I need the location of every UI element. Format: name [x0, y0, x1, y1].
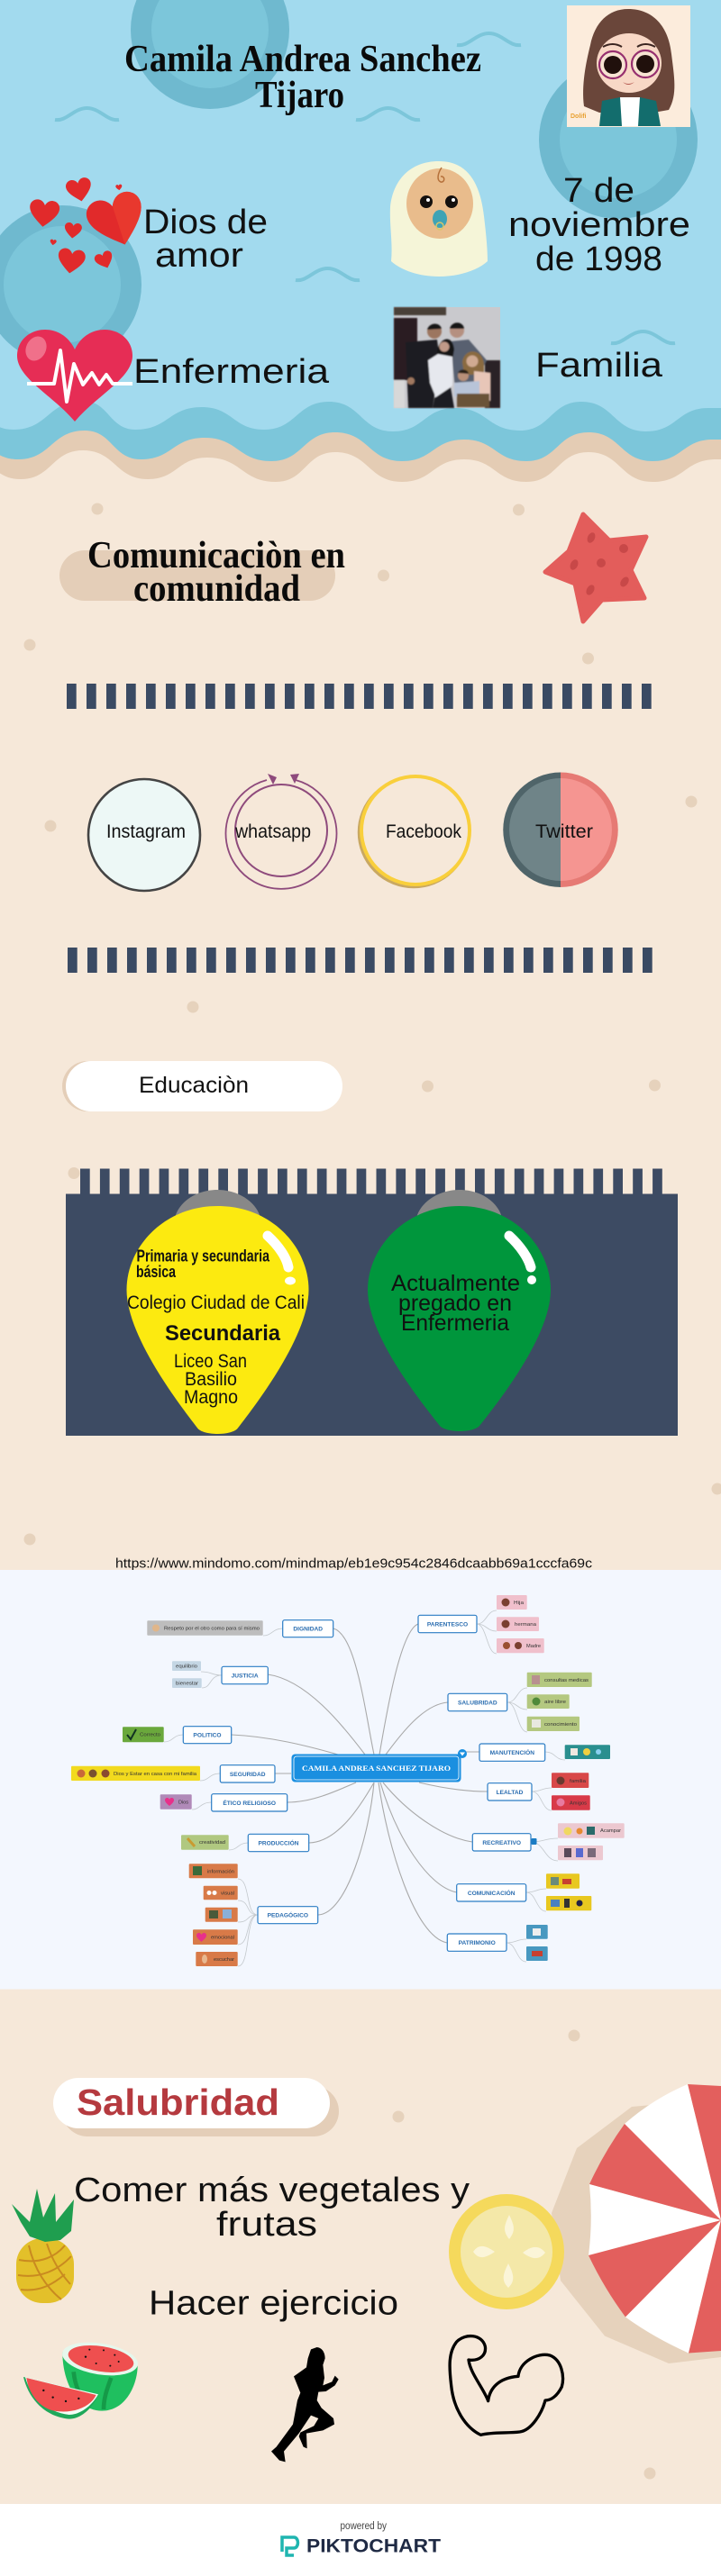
- text: birth date: [508, 172, 690, 278]
- mindmap branch: DIGNIDAD: Respeto por el otro como para sí mismo: [164, 1627, 260, 1632]
- mindmap branch: PEDAGÓGICO: escuchar: [214, 1957, 234, 1963]
- text: eat more vegetables and fruit: frutas: [216, 2206, 317, 2244]
- bulb: yellow, school history: Magno: [184, 1387, 238, 1408]
- heading: Comunicación en comunidad: [59, 535, 345, 610]
- mindmap branch: PARENTESCO: Madre: [526, 1644, 541, 1649]
- mindmap connectors: [164, 1610, 565, 1966]
- text: Dios de amor: [143, 204, 268, 275]
- bulb: green, current studies: [368, 1190, 551, 1431]
- piktochart credit: [282, 2521, 441, 2556]
- mindmap branch: SALUBRIDAD: SALUBRIDAD: [458, 1701, 497, 1706]
- mindmap branch: PARENTESCO: PARENTESCO: [427, 1621, 468, 1628]
- bulb: green, current studies: pregado en: [398, 1291, 512, 1316]
- mindmap branch: PRODUCCIÓN: creatividad: [199, 1840, 225, 1846]
- photo: family: [394, 307, 500, 408]
- piktochart credit: PIKTOCHART: [306, 2536, 441, 2556]
- mindmap branch: JUSTICIA: equilibrio: [176, 1664, 197, 1670]
- mindmap branch: SEGURIDAD: SEGURIDAD: [230, 1772, 266, 1778]
- heading: Educación: Educaciòn: [139, 1073, 249, 1098]
- mindmap branch: PARENTESCO: [418, 1595, 544, 1653]
- mindmap branch: POLITICO: POLITICO: [193, 1733, 222, 1738]
- mindmap branch: ÉTICO RELIGIOSO: Dios: [178, 1800, 189, 1805]
- mindmap branch: LEALTAD: familia: [570, 1779, 586, 1784]
- social circle: whatsapp: whatsapp: [234, 821, 311, 842]
- heading: Educación: [62, 1061, 342, 1111]
- icon: hearts: [28, 177, 151, 275]
- mindmap branch: JUSTICIA: [172, 1661, 268, 1688]
- text: eat more vegetables and fruit: Comer más vegetales y: [74, 2172, 470, 2209]
- icon: avatar portrait: Dolifi: [570, 113, 587, 120]
- heading: Salubridad: [53, 2078, 339, 2136]
- icon: starfish: [545, 514, 646, 621]
- mindmap branch: DIGNIDAD: DIGNIDAD: [293, 1627, 323, 1632]
- text: Dios de amor: Dios de: [143, 204, 268, 241]
- panel: education board: [66, 1182, 678, 1436]
- icon: watermelon: [23, 2337, 141, 2419]
- social circle: Twitter: Twitter: [535, 821, 593, 842]
- mindmap branch: SALUBRIDAD: conocimiento: [544, 1722, 577, 1728]
- mindmap central node: [292, 1749, 467, 1782]
- social circle: whatsapp: [225, 774, 337, 889]
- title: Camila Andrea Sanchez: [124, 39, 481, 80]
- mindmap branch: PRODUCCIÓN: [181, 1834, 309, 1852]
- mindmap branch: DIGNIDAD: [147, 1620, 333, 1637]
- bulb: yellow, school history: Basilio: [185, 1369, 237, 1390]
- header sky background: [0, 0, 721, 477]
- text: Dios de amor: amor: [155, 237, 243, 275]
- mindmap branch: MANUTENCIÓN: [479, 1744, 610, 1761]
- social circle: Facebook: Facebook: [386, 821, 461, 842]
- text: exercise: Hacer ejercicio: [149, 2284, 398, 2322]
- bulb: green, current studies: Actualmente: [391, 1271, 520, 1296]
- mindmap branch: PATRIMONIO: [447, 1925, 548, 1961]
- mindmap branch: SALUBRIDAD: aire libre: [544, 1700, 566, 1705]
- bulb: green, current studies: Enfermeria: [401, 1311, 509, 1336]
- bulb: yellow, school history: [126, 1190, 308, 1434]
- mindmap branch: PEDAGÓGICO: [189, 1864, 318, 1966]
- bulb: yellow, school history: Liceo San: [174, 1351, 247, 1372]
- mindmap branch: ÉTICO RELIGIOSO: ÉTICO RELIGIOSO: [223, 1799, 276, 1807]
- mindmap branch: COMUNICACIÓN: [457, 1873, 591, 1910]
- mindmap branch: PEDAGÓGICO: visual: [221, 1891, 234, 1897]
- mindmap branch: MANUTENCIÓN: MANUTENCIÓN: [490, 1748, 534, 1756]
- mindmap branch: SALUBRIDAD: consultas medicas: [544, 1678, 589, 1683]
- social circle: Instagram: [88, 779, 200, 891]
- mindmap branch: COMUNICACIÓN: COMUNICACIÓN: [468, 1889, 516, 1897]
- mindmap branch: PEDAGÓGICO: PEDAGÓGICO: [268, 1911, 308, 1918]
- mindmap branch: RECREATIVO: RECREATIVO: [482, 1840, 521, 1846]
- icon: flexed arm outline: [450, 2336, 563, 2435]
- beach umbrella: [552, 2084, 721, 2363]
- ocean and shore waves: [0, 401, 721, 522]
- mindmap branch: PRODUCCIÓN: PRODUCCIÓN: [258, 1839, 299, 1846]
- icon: heartbeat heart: [17, 330, 132, 422]
- heading: Salubridad: Salubridad: [77, 2082, 279, 2123]
- mindmap branch: SEGURIDAD: Dios y Estar en casa con mi familia: [114, 1772, 196, 1777]
- social circle: Twitter: [503, 773, 618, 887]
- mindmap branch: JUSTICIA: bienestar: [176, 1681, 198, 1686]
- icon: runner silhouette: [271, 2347, 339, 2462]
- mindmap branch: PATRIMONIO: PATRIMONIO: [459, 1940, 496, 1946]
- title: [124, 39, 481, 116]
- icon: lemon slice: [449, 2194, 564, 2309]
- social circle: Instagram: Instagram: [106, 821, 186, 842]
- text: birth date: noviembre: [508, 206, 690, 244]
- heading: Comunicación en comunidad: Comunicaciòn en: [87, 535, 345, 576]
- mindmap branch: ÉTICO RELIGIOSO: [160, 1794, 287, 1811]
- bulb: yellow, school history: Primaria y secundaria: [137, 1247, 270, 1265]
- divider bars top: [67, 684, 652, 709]
- title: Tijaro: [255, 75, 344, 116]
- divider bars bottom: [68, 948, 653, 973]
- mindmap branch: LEALTAD: LEALTAD: [497, 1790, 524, 1796]
- piktochart credit: powered by: [341, 2521, 387, 2532]
- sand dots: [23, 503, 721, 2479]
- mindmap branch: LEALTAD: Amigos: [570, 1801, 588, 1807]
- text: Enfermeria: Enfermeria: [133, 353, 330, 391]
- mindmap branch: PARENTESCO: Hija: [514, 1601, 524, 1606]
- mindmap branch: PARENTESCO: hermana: [515, 1622, 536, 1628]
- decorative circles in the sky: [0, 0, 698, 364]
- text: birth date: de 1998: [535, 240, 662, 278]
- social circle: Facebook: [360, 776, 470, 886]
- mindmap branch: PEDAGÓGICO: emocional: [211, 1935, 234, 1940]
- mindmap branch: RECREATIVO: Acampar: [600, 1828, 621, 1834]
- icon: avatar portrait: [567, 5, 690, 127]
- text: Familia: Familia: [535, 347, 663, 385]
- mindmap branch: POLITICO: Correcto: [140, 1733, 160, 1738]
- small wave marks: [55, 33, 675, 343]
- text: eat more vegetables and fruit: [74, 2172, 470, 2244]
- heading: Comunicación en comunidad: comunidad: [133, 568, 300, 610]
- mindmap link text: https://www.mindomo.com/mindmap/eb1e9c954c2846dcaabb69a1cccfa69c: [115, 1556, 593, 1571]
- mindmap central node: CAMILA ANDREA SANCHEZ TIJARO: [302, 1764, 451, 1773]
- mindmap branch: LEALTAD: [488, 1773, 590, 1810]
- footer band: [0, 2504, 721, 2576]
- icon: baby: [390, 161, 488, 277]
- bulb: yellow, school history: Secundaria: [165, 1321, 281, 1346]
- text: birth date: 7 de: [563, 172, 634, 210]
- mindmap branch: POLITICO: [123, 1727, 232, 1744]
- mindmap branch: SALUBRIDAD: [448, 1673, 592, 1731]
- mindmap branch: SEGURIDAD: [71, 1765, 275, 1782]
- bulb: yellow, school history: Colegio Ciudad de Cali: [127, 1293, 305, 1313]
- mindmap branch: RECREATIVO: [472, 1823, 625, 1860]
- mindmap branch: JUSTICIA: JUSTICIA: [232, 1673, 259, 1679]
- mindmap branch: PEDAGÓGICO: información: [207, 1870, 234, 1875]
- mindmap background: [0, 1570, 721, 1989]
- bulb: yellow, school history: básica: [136, 1263, 177, 1281]
- icon: pineapple: [12, 2189, 74, 2303]
